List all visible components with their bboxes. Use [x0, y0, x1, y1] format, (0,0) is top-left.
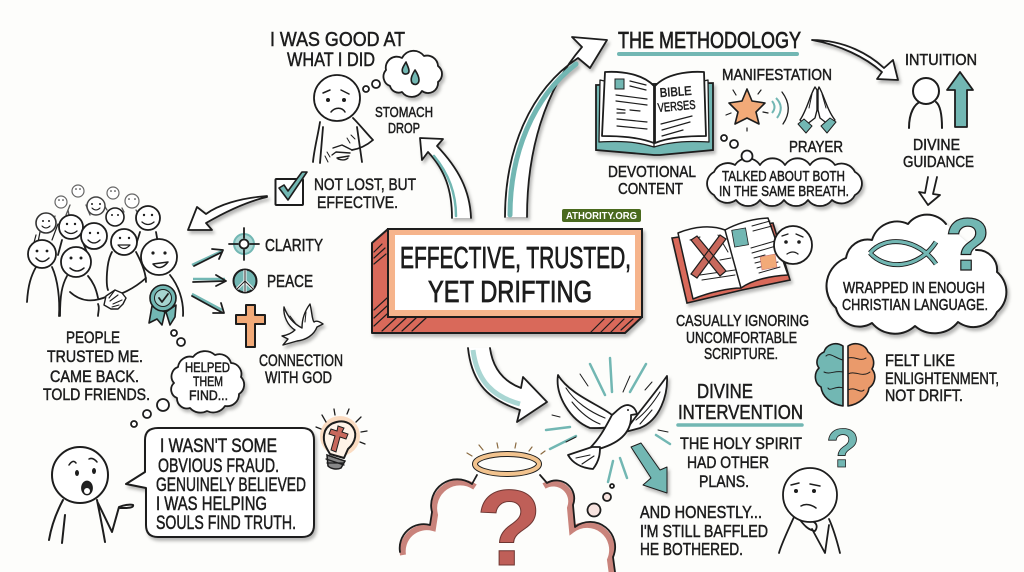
icon: check box: [276, 172, 307, 205]
icon: brain: [815, 344, 875, 406]
label: stomach drop: STOMACH: [375, 105, 433, 121]
speech bubble: I wasn't some obvious fraud: I WAS HELPING: [156, 494, 267, 515]
cloud: wrapped in christian language: CHRISTIAN LANGUAGE.: [842, 297, 988, 314]
label: manifestation: MANIFESTATION: [722, 67, 832, 84]
icon: orange cross: [236, 305, 265, 347]
heading: I was good at: WHAT I DID: [287, 50, 375, 71]
central title box: EFFECTIVE, TRUSTED,: [400, 240, 631, 275]
text: people trusted me: TRUSTED ME.: [47, 347, 143, 366]
arrow: to crowd: [188, 196, 267, 230]
speech bubble: I wasn't some obvious fraud: SOULS FIND TRUTH.: [156, 513, 296, 534]
icon: open bible: VERSES: [657, 98, 696, 115]
text: holy spirit: [680, 434, 802, 491]
face dots: [36, 188, 167, 260]
icon: peace sign: [234, 270, 256, 292]
rays: [546, 358, 670, 482]
label: connection with god: CONNECTION: [259, 352, 343, 370]
ribbon badge: [149, 285, 176, 325]
label: devotional content: DEVOTIONAL: [608, 164, 696, 181]
arrow: center to stomach drop: [420, 138, 471, 218]
thought cloud: talked about both: TALKED ABOUT BOTH: [722, 168, 845, 185]
section: intuition and divine guidance: [827, 52, 1006, 334]
label: stomach drop: [375, 105, 433, 137]
icon: open bible: BIBLE: [659, 84, 692, 100]
label: divine guidance: DIVINE: [913, 137, 960, 154]
text: and honestly: [640, 502, 768, 559]
arrow: to peace: [193, 275, 226, 286]
icon: person: [909, 78, 942, 128]
icon: question mark: ?: [826, 417, 860, 479]
text: people trusted me: CAME BACK.: [50, 367, 139, 386]
icon: worried face: [774, 226, 812, 264]
icon: small dove: [282, 304, 323, 345]
icon: sound waves: [772, 92, 788, 124]
illustration: cloud with halo and red question mark: [400, 443, 615, 572]
heading: divine intervention: [678, 381, 803, 425]
thought cloud: talked about both: [707, 135, 862, 206]
icon: teal up arrow: [947, 72, 973, 127]
text: and honestly: I'M STILL BAFFLED: [640, 521, 768, 541]
heading: divine intervention: DIVINE: [697, 381, 753, 403]
label: casually ignoring: SCRIPTURE.: [704, 346, 778, 363]
label: clarity: CLARITY: [265, 235, 323, 255]
arrow: to connection: [192, 294, 224, 313]
label: divine guidance: GUIDANCE: [903, 154, 974, 171]
icon: surprised person: [49, 447, 133, 543]
heading: I was good at: I WAS GOOD AT: [270, 29, 405, 51]
label: divine guidance: [903, 137, 974, 171]
thought cloud: helped them find: THEM: [193, 374, 223, 389]
arrow: dove to text: [631, 443, 667, 493]
label: casually ignoring: [676, 313, 809, 363]
thought cloud: helped them find: FIND...: [189, 388, 228, 403]
section: I was good at: [270, 29, 442, 163]
text: holy spirit: HAD OTHER: [687, 453, 769, 472]
icon: praying hands: [798, 87, 836, 133]
thought cloud: helped them find: HELPED: [185, 360, 230, 375]
callout: not lost, but effective: EFFECTIVE.: [317, 193, 398, 212]
section: felt like enlightenment: [815, 344, 999, 406]
label: connection with god: [259, 352, 343, 387]
central title box: [372, 229, 642, 333]
label: peace: PEACE: [267, 271, 313, 291]
section: ignoring scripture: [672, 218, 812, 363]
text: people trusted me: TOLD FRIENDS.: [43, 385, 150, 404]
icon: open bible: [596, 72, 713, 155]
list: what people found: [192, 228, 343, 387]
arrow: to clarity: [192, 249, 223, 266]
section: the methodology: [596, 27, 862, 206]
illustration: crowd of trusting people: [27, 185, 183, 325]
heading: divine intervention: INTERVENTION: [678, 402, 803, 424]
heading: I was good at: [270, 29, 405, 71]
label: casually ignoring: CASUALLY IGNORING: [676, 313, 809, 330]
text: holy spirit: THE HOLY SPIRIT: [680, 434, 802, 453]
label: casually ignoring: UNCOMFORTABLE: [686, 330, 797, 347]
thought cloud: talked about both: IN THE SAME BREATH.: [719, 183, 849, 200]
icon: fish: [870, 242, 936, 265]
text: and honestly: AND HONESTLY...: [640, 502, 762, 522]
cloud: wrapped in christian language: [827, 203, 1006, 334]
heading: the methodology: THE METHODOLOGY: [618, 27, 801, 53]
callout: not lost, but effective: NOT LOST, BUT: [314, 176, 416, 194]
label: intuition: INTUITION: [905, 52, 977, 69]
icon: teal question mark: ?: [945, 203, 990, 286]
arrow: center to methodology: [505, 37, 607, 217]
arrow: center to dove: [468, 348, 547, 422]
speech bubble: I wasn't some obvious fraud: [126, 428, 314, 537]
cloud: wrapped in christian language: WRAPPED IN ENOUGH: [843, 280, 985, 297]
badge: athority.org: ATHORITY.ORG: [566, 211, 637, 222]
icon: target: [229, 228, 259, 260]
icon: star: [726, 89, 768, 131]
section: divine intervention: [640, 381, 860, 559]
label: prayer: PRAYER: [789, 139, 843, 156]
arrow: methodology to intuition: [812, 40, 898, 80]
icon: worried person holding stomach: [313, 75, 373, 163]
icon: confused thinker: [779, 468, 840, 553]
text: felt like enlightenment: NOT DRIFT.: [885, 386, 963, 405]
illustration: dove with rays: [546, 358, 670, 482]
label: connection with god: WITH GOD: [265, 369, 332, 387]
thought cloud: helped them find: [131, 330, 244, 427]
text: people trusted me: PEOPLE: [66, 328, 120, 347]
label: devotional content: CONTENT: [618, 181, 683, 198]
text: felt like enlightenment: [885, 351, 999, 405]
text: holy spirit: PLANS.: [699, 472, 749, 491]
label: devotional content: [608, 164, 696, 198]
icon: light bulb with cross: [316, 409, 367, 469]
speech bubble: I wasn't some obvious fraud: GENUINELY BELIEVED: [156, 475, 306, 496]
text: felt like enlightenment: FELT LIKE: [885, 351, 955, 370]
icon: open book with x: [672, 218, 790, 303]
thought bubbles: [363, 80, 380, 92]
text: people trusted me: [43, 328, 150, 404]
speech bubble: I wasn't some obvious fraud: I WASN'T SOME: [160, 436, 277, 457]
label: stomach drop: DROP: [388, 121, 420, 137]
callout: not lost, but effective: [276, 172, 416, 212]
text: and honestly: HE BOTHERED.: [640, 539, 743, 559]
central title box: YET DRIFTING: [428, 274, 592, 309]
speech bubble: I wasn't some obvious fraud: OBVIOUS FRAUD.: [158, 456, 279, 477]
arrow: guidance to cloud: [919, 177, 940, 205]
icon: halo: [467, 443, 545, 474]
cloud with teal drops: [383, 51, 442, 97]
